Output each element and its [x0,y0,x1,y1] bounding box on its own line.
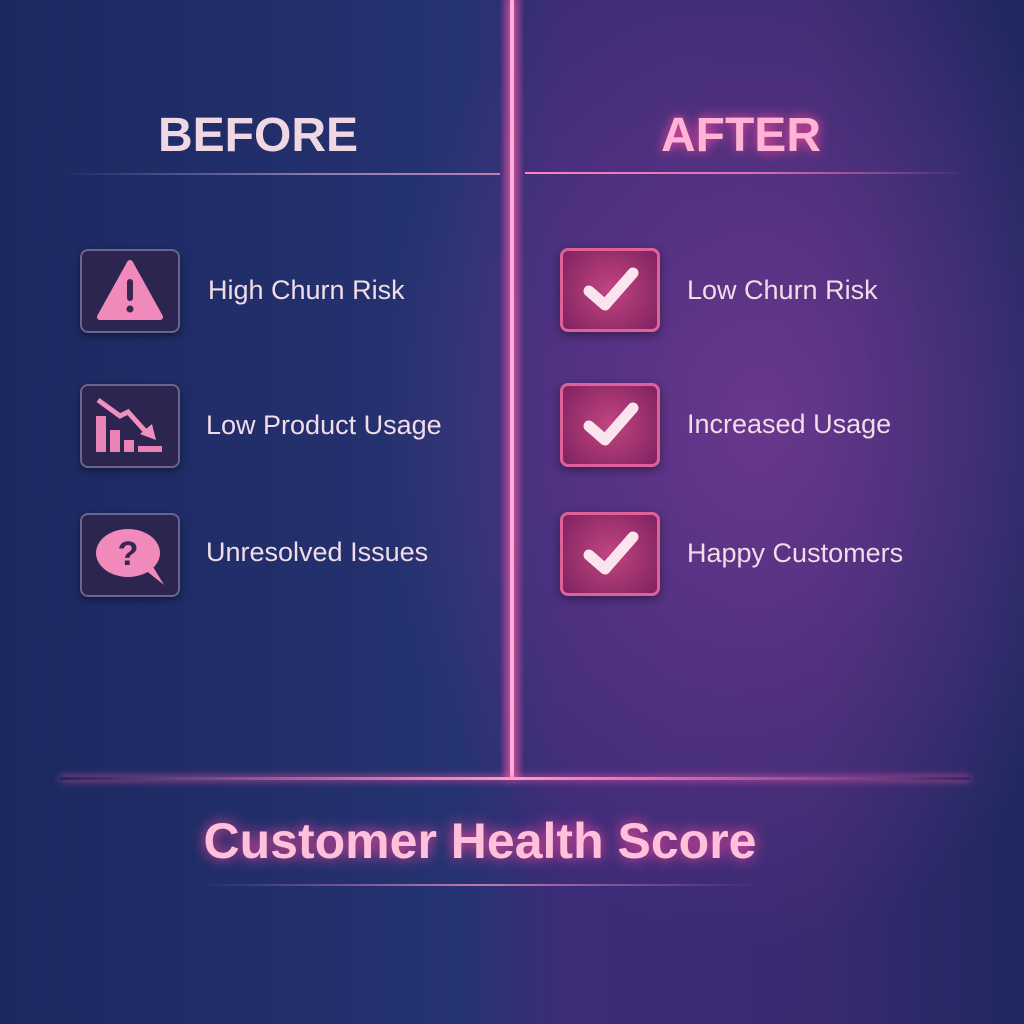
label: Happy Customers [687,538,903,568]
after item: low churn [555,246,878,340]
label: Increased Usage [687,409,891,439]
label: Low Product Usage [206,410,442,440]
before item: high churn [77,248,405,340]
icon: check [560,512,660,596]
icon: declining chart [80,384,180,468]
icon: check [560,248,660,332]
heading: after: AFTER [661,109,821,162]
label: Low Churn Risk [687,275,878,305]
icon: warning [80,249,180,333]
divider glow vertical [500,0,524,780]
before item: low usage [77,384,442,474]
label: High Churn Risk [208,275,405,305]
title: customer health score: Customer Health Score [204,813,756,869]
heading: before: BEFORE [158,109,358,162]
icon: check [560,383,660,467]
after item: happy customers [555,510,903,604]
icon: question bubble [80,513,180,597]
before item: unresolved [77,512,428,604]
label: Unresolved Issues [206,537,428,567]
icon: question bubble: ? [118,535,138,573]
after item: increased usage [555,381,891,475]
